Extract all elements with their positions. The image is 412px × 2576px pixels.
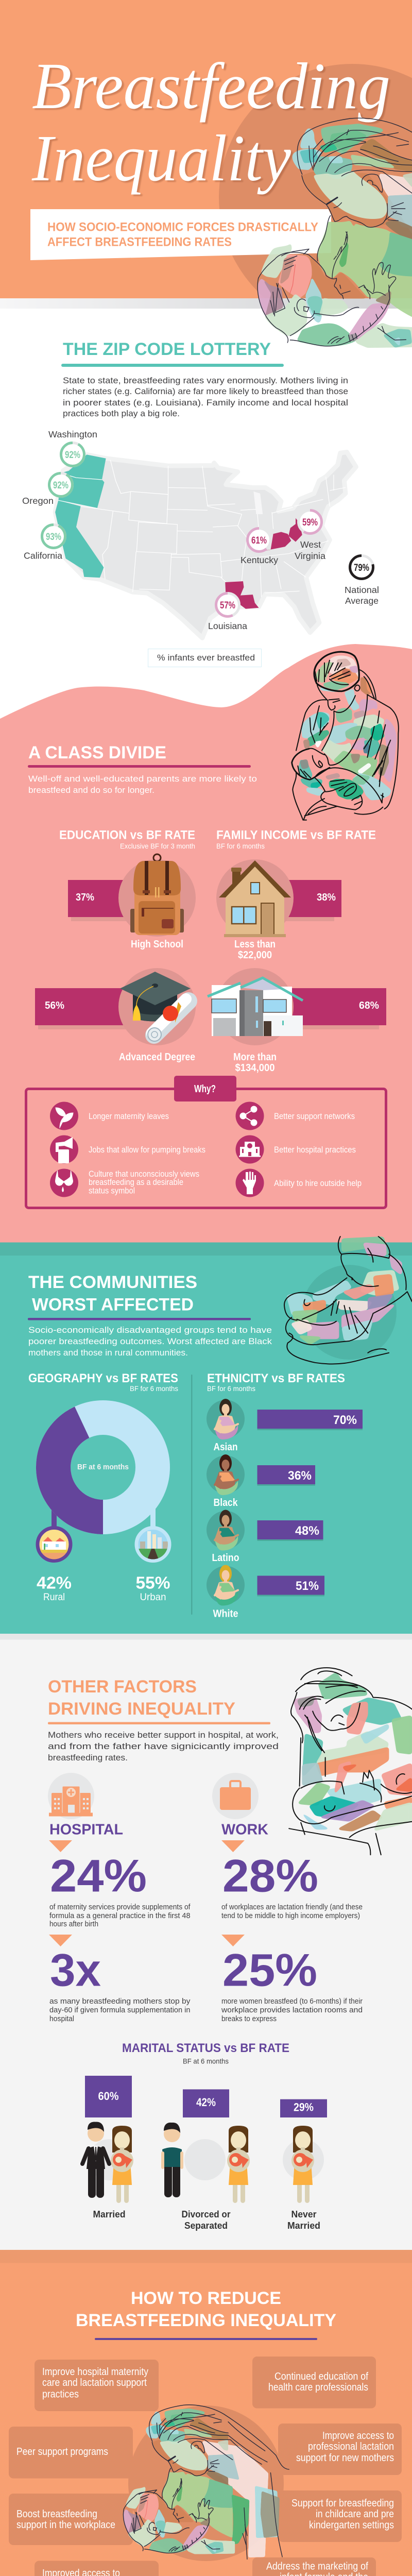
chart title: education <box>59 828 195 850</box>
box: marketing of formula: Address the marketing of <box>266 2561 368 2572</box>
panel: a class divide <box>0 644 412 1243</box>
box: childcare support <box>278 2490 402 2542</box>
row: Black 36% <box>207 1454 315 1509</box>
box: workplace support: Boost breastfeeding <box>16 2508 97 2520</box>
box: hospital care: care and lactation support <box>42 2377 147 2388</box>
row: Black 36%: Black <box>213 1497 238 1509</box>
heading: A CLASS DIVIDE <box>28 743 166 762</box>
box: marketing of formula <box>252 2557 376 2576</box>
label: divorced or separated: Divorced or <box>181 2209 231 2219</box>
stat: 25%: breaks to express <box>221 2015 277 2023</box>
chart title: family income <box>216 828 376 850</box>
map of the United States <box>55 452 356 638</box>
label: less than $22,000: $22,000 <box>238 950 272 961</box>
stat: urban 55%: Urban <box>140 1592 166 1603</box>
gauge: California 93%: 93% <box>46 532 61 543</box>
chart title: geography: GEOGRAPHY vs BF RATES <box>28 1371 178 1385</box>
reason text: Better support networks <box>274 1111 355 1121</box>
icon: helping hands <box>236 1168 264 1197</box>
box: professional lactation support: professional lactation <box>308 2441 394 2452</box>
icon: small house <box>216 859 294 937</box>
panel: the zip code lottery <box>22 340 379 667</box>
heading: BREASTFEEDING INEQUALITY <box>76 2311 336 2330</box>
subtitle banner: AFFECT BREASTFEEDING RATES <box>47 235 232 249</box>
chart title: family income: FAMILY INCOME vs BF RATE <box>216 828 376 842</box>
box: hospital care: Improve hospital maternity <box>42 2366 149 2378</box>
label: never married: Married <box>287 2221 320 2231</box>
icon: briefcase <box>212 1773 259 1819</box>
icon: leaves <box>50 1101 78 1130</box>
icon: urban scene <box>135 1528 171 1562</box>
intro text <box>28 774 257 795</box>
row: Asian 70%: Asian <box>213 1442 238 1453</box>
heading <box>28 1273 197 1315</box>
figures: married couple <box>82 2122 133 2203</box>
box: peer support <box>9 2427 133 2478</box>
box: peer support: Peer support programs <box>16 2446 108 2458</box>
reason text <box>89 1169 199 1196</box>
label: high school: High School <box>131 939 183 950</box>
state labels: West <box>300 539 321 550</box>
heading <box>48 1677 235 1719</box>
row: Latino 48% <box>207 1510 323 1564</box>
state labels: California <box>24 550 62 561</box>
icon: modern house <box>208 968 303 1045</box>
chart title: geography: BF for 6 months <box>130 1384 178 1393</box>
stat: 24%: hours after birth <box>49 1920 98 1928</box>
label: more than $134,000: $134,000 <box>235 1062 275 1074</box>
state labels: Washington <box>48 429 97 439</box>
row: White 51%: White <box>213 1608 238 1620</box>
stat: 25%: more women breastfeed (to 6-months) if their <box>221 1997 363 2006</box>
heading rule <box>61 364 284 367</box>
gauge: national average 79%: 79% <box>354 563 369 573</box>
figure: never married <box>283 2126 324 2203</box>
box: hospital care <box>35 2360 159 2411</box>
arrow: work <box>221 1840 245 1852</box>
stat: 3x: 3x <box>50 1944 101 1996</box>
title: Breastfeeding <box>32 49 390 123</box>
box: childcare support: Support for breastfeeding <box>291 2497 394 2509</box>
stat: rural 42%: 42% <box>37 1573 72 1592</box>
gauge: West Virginia 59% <box>299 510 321 534</box>
row: Latino 48%: Latino <box>212 1552 239 1564</box>
heading: OTHER FACTORS <box>48 1677 197 1697</box>
panel: why <box>26 1076 386 1208</box>
stat: 3x: day-60 if given formula supplementation in <box>49 2006 191 2014</box>
bar: never married 29%: 29% <box>294 2101 314 2113</box>
label: less than $22,000 <box>234 939 276 961</box>
bar: less than $22,000 38%: 38% <box>317 892 336 903</box>
box: professional lactation support <box>278 2424 402 2475</box>
label: married: Married <box>93 2209 126 2219</box>
bar: married 60% <box>85 2076 132 2117</box>
stat: 24% <box>49 1850 191 1928</box>
box: education and information <box>35 2561 159 2576</box>
gauge: Washington 92%: 92% <box>65 450 80 461</box>
stat: 25%: 25% <box>222 1944 317 1996</box>
intro text <box>48 1731 279 1762</box>
gauge: Kentucky 61% <box>247 529 271 551</box>
row: Asian 70% <box>207 1399 363 1453</box>
arrow: hospital <box>49 1840 72 1852</box>
chart title: ethnicity: ETHNICITY vs BF RATES <box>207 1371 345 1385</box>
intro text: breastfeeding rates. <box>48 1753 128 1762</box>
heading: DRIVING INEQUALITY <box>48 1699 235 1719</box>
illustration: mother holding baby <box>284 1236 412 1364</box>
bar: high school 37% <box>68 880 128 921</box>
state labels <box>22 429 379 631</box>
reason text: Ability to hire outside help <box>274 1178 362 1188</box>
why tab: Why? <box>194 1083 216 1095</box>
row: White 51% <box>207 1565 324 1620</box>
shaded circle behind illustration <box>128 2405 284 2561</box>
chart title: marital status: BF at 6 months <box>183 2057 229 2065</box>
chart title: ethnicity: BF for 6 months <box>207 1384 255 1393</box>
intro text: Socio-economically disadvantaged groups tend to have <box>28 1326 272 1335</box>
icon: hospital <box>236 1136 264 1163</box>
intro text: and from the father have signicicantly improved <box>48 1742 279 1751</box>
bar: advanced degree 56% <box>35 988 128 1029</box>
panel: other factors driving inequality <box>0 1634 412 2250</box>
heading <box>76 2289 336 2330</box>
reason text: Culture that unconsciously views <box>89 1169 199 1179</box>
reason text: breastfeeding as a desirable <box>89 1177 183 1187</box>
illustration: mother leaning over baby <box>289 1668 412 1855</box>
stat: 28% <box>221 1850 363 1920</box>
bar: divorced or separated 42% <box>183 2089 229 2117</box>
icon: backpack <box>118 854 196 937</box>
gauge: Louisiana 57%: 57% <box>220 600 235 611</box>
map legend <box>148 649 262 667</box>
state labels: Virginia <box>295 551 325 561</box>
label: divorced or separated: Separated <box>184 2221 228 2231</box>
icon: graduation cap and diploma <box>118 968 196 1045</box>
panel: hero header <box>0 0 412 355</box>
bar: divorced or separated 42%: 42% <box>196 2096 216 2109</box>
row: Asian 70%: 70% <box>333 1413 357 1427</box>
bar: more than $134,000 68%: 68% <box>359 1000 379 1011</box>
gauge: national average 79% <box>350 555 373 579</box>
heading: THE COMMUNITIES <box>28 1273 197 1292</box>
icon: rural scene <box>36 1528 72 1563</box>
chart title: education: Exclusive BF for 3 month <box>120 842 195 850</box>
pink wave background <box>0 644 412 1243</box>
intro text: breastfeed and do so for longer. <box>28 786 154 795</box>
box: health care education: Continued education of <box>274 2370 368 2382</box>
illustration: mother cradling baby <box>292 652 399 820</box>
gauge: Oregon 92% <box>49 473 72 497</box>
intro text: mothers and those in rural communities. <box>28 1348 188 1358</box>
arrow: hospital second <box>49 1935 72 1946</box>
state labels: Kentucky <box>241 555 278 565</box>
intro text: Well-off and well-educated parents are more likely to <box>28 774 257 784</box>
reason text: status symbol <box>89 1186 135 1196</box>
reason text: Better hospital practices <box>274 1145 356 1155</box>
heading rule <box>28 1318 251 1320</box>
box: workplace support: support in the workplace <box>16 2519 115 2531</box>
state labels: Average <box>345 596 379 606</box>
row: White 51%: 51% <box>296 1579 319 1593</box>
label: never married <box>287 2209 320 2231</box>
bar: advanced degree 56%: 56% <box>45 1000 64 1011</box>
stat: rural 42% <box>37 1573 72 1603</box>
stat: 28%: 28% <box>222 1850 318 1902</box>
icon: breast pump <box>50 1136 78 1163</box>
label: less than $22,000: Less than <box>234 939 276 950</box>
bar: never married 29% <box>280 2099 327 2117</box>
stat: 3x: hospital <box>49 2015 74 2023</box>
stat: urban 55%: 55% <box>136 1573 170 1592</box>
gauge: West Virginia 59%: 59% <box>302 517 318 528</box>
figures: divorced or separated <box>161 2123 250 2203</box>
bar: less than $22,000 38% <box>281 880 341 921</box>
box: childcare support: in childcare and pre <box>316 2508 394 2520</box>
chart title: education: EDUCATION vs BF RATE <box>59 828 195 842</box>
box: childcare support: kindergarten settings <box>309 2519 394 2531</box>
donut chart: rural vs urban <box>36 1406 156 1534</box>
heading: THE ZIP CODE LOTTERY <box>63 340 271 359</box>
subtitle banner: HOW SOCIO-ECONOMIC FORCES DRASTICALLY <box>47 221 318 234</box>
bar: high school 37%: 37% <box>76 892 94 903</box>
icon: nursing bra <box>50 1168 78 1197</box>
bar: more than $134,000 68% <box>281 988 386 1029</box>
intro text: richer states (e.g. California) are far more likely to breastfeed than those <box>63 387 348 396</box>
heading rule <box>95 2338 317 2340</box>
icon: network <box>236 1101 264 1130</box>
heading rule <box>28 765 251 768</box>
label: more than $134,000: More than <box>233 1052 277 1063</box>
chart title: geography <box>28 1371 178 1393</box>
stat: 25%: workplace provides lactation rooms and <box>221 2006 363 2014</box>
box: health care education <box>252 2357 376 2408</box>
illustration: mother nursing baby <box>123 2405 289 2559</box>
gauge: California 93% <box>42 524 65 548</box>
intro text: in poorer states (e.g. Louisiana). Family income and local hospital <box>63 398 348 408</box>
intro text: State to state, breastfeeding rates vary enormously. Mothers living in <box>63 376 348 385</box>
donut chart: rural vs urban: BF at 6 months <box>77 1463 129 1471</box>
stat: 24%: of maternity services provide supplements of <box>49 1903 191 1911</box>
arrow: work second <box>221 1935 245 1946</box>
intro text: poorer breastfeeding outcomes. Worst affected are Black <box>28 1337 272 1346</box>
title <box>31 49 390 195</box>
stat: rural 42%: Rural <box>43 1592 65 1603</box>
box: professional lactation support: support for new mothers <box>296 2452 394 2464</box>
box: workplace support <box>9 2494 133 2545</box>
label: divorced or separated <box>181 2209 231 2231</box>
row: Black 36%: 36% <box>288 1469 312 1483</box>
hospital heading: HOSPITAL <box>49 1822 123 1838</box>
stat: 3x: as many breastfeeding mothers stop by <box>49 1997 191 2006</box>
stat: 28%: of workplaces are lactation friendly (and these <box>221 1903 363 1911</box>
work heading: WORK <box>221 1822 268 1838</box>
stat: 25% <box>221 1944 363 2023</box>
panel: how to reduce breastfeeding inequality <box>0 2250 412 2576</box>
gauge: Washington 92% <box>61 443 84 466</box>
stat: 3x <box>49 1944 191 2023</box>
icon: hospital <box>48 1773 94 1819</box>
shaded circle behind mother <box>302 1265 397 1360</box>
stat: urban 55% <box>136 1573 170 1603</box>
chart title: ethnicity <box>207 1371 345 1393</box>
decorative darker circle <box>219 64 412 298</box>
heading rule <box>48 1722 270 1724</box>
chart title: family income: BF for 6 months <box>216 842 265 850</box>
gauge: Oregon 92%: 92% <box>53 480 68 491</box>
title: Inequality <box>31 122 291 195</box>
intro text <box>63 376 348 418</box>
heading: HOW TO REDUCE <box>131 2289 281 2308</box>
state labels: National <box>345 585 379 595</box>
label: never married: Never <box>291 2209 316 2219</box>
intro text: Mothers who receive better support in hospital, at work, <box>48 1731 279 1740</box>
state labels: Louisiana <box>208 621 247 631</box>
bar: married 60%: 60% <box>98 2090 118 2103</box>
gauge: Louisiana 57% <box>216 594 239 616</box>
illustration: mother nursing baby <box>258 118 412 355</box>
reason text: Longer maternity leaves <box>89 1111 169 1121</box>
stat: 28%: tend to be middle to high income employers) <box>221 1912 360 1920</box>
box: hospital care: practices <box>42 2388 79 2400</box>
panel: the communities worst affected <box>0 1236 412 1634</box>
label: advanced degree: Advanced Degree <box>119 1052 195 1063</box>
reason text: Jobs that allow for pumping breaks <box>89 1145 205 1155</box>
chart title: marital status <box>122 2041 289 2065</box>
intro text: practices both play a big role. <box>63 409 180 418</box>
why tab <box>174 1076 236 1101</box>
divider <box>191 1375 193 1615</box>
chart title: marital status: MARITAL STATUS vs BF RATE <box>122 2041 289 2055</box>
stat: 24%: formula as a general practice in the first 48 <box>49 1912 191 1920</box>
gauge: Kentucky 61%: 61% <box>251 535 267 546</box>
heading: WORST AFFECTED <box>32 1295 194 1315</box>
stat: 24%: 24% <box>50 1850 147 1902</box>
row: Latino 48%: 48% <box>295 1524 319 1538</box>
intro text <box>28 1326 272 1358</box>
map legend: % infants ever breastfed <box>157 653 255 663</box>
label: more than $134,000 <box>233 1052 277 1074</box>
box: professional lactation support: Improve access to <box>322 2430 394 2442</box>
box: health care education: health care professionals <box>268 2381 368 2393</box>
state labels: Oregon <box>22 496 54 506</box>
subtitle banner <box>30 209 331 260</box>
